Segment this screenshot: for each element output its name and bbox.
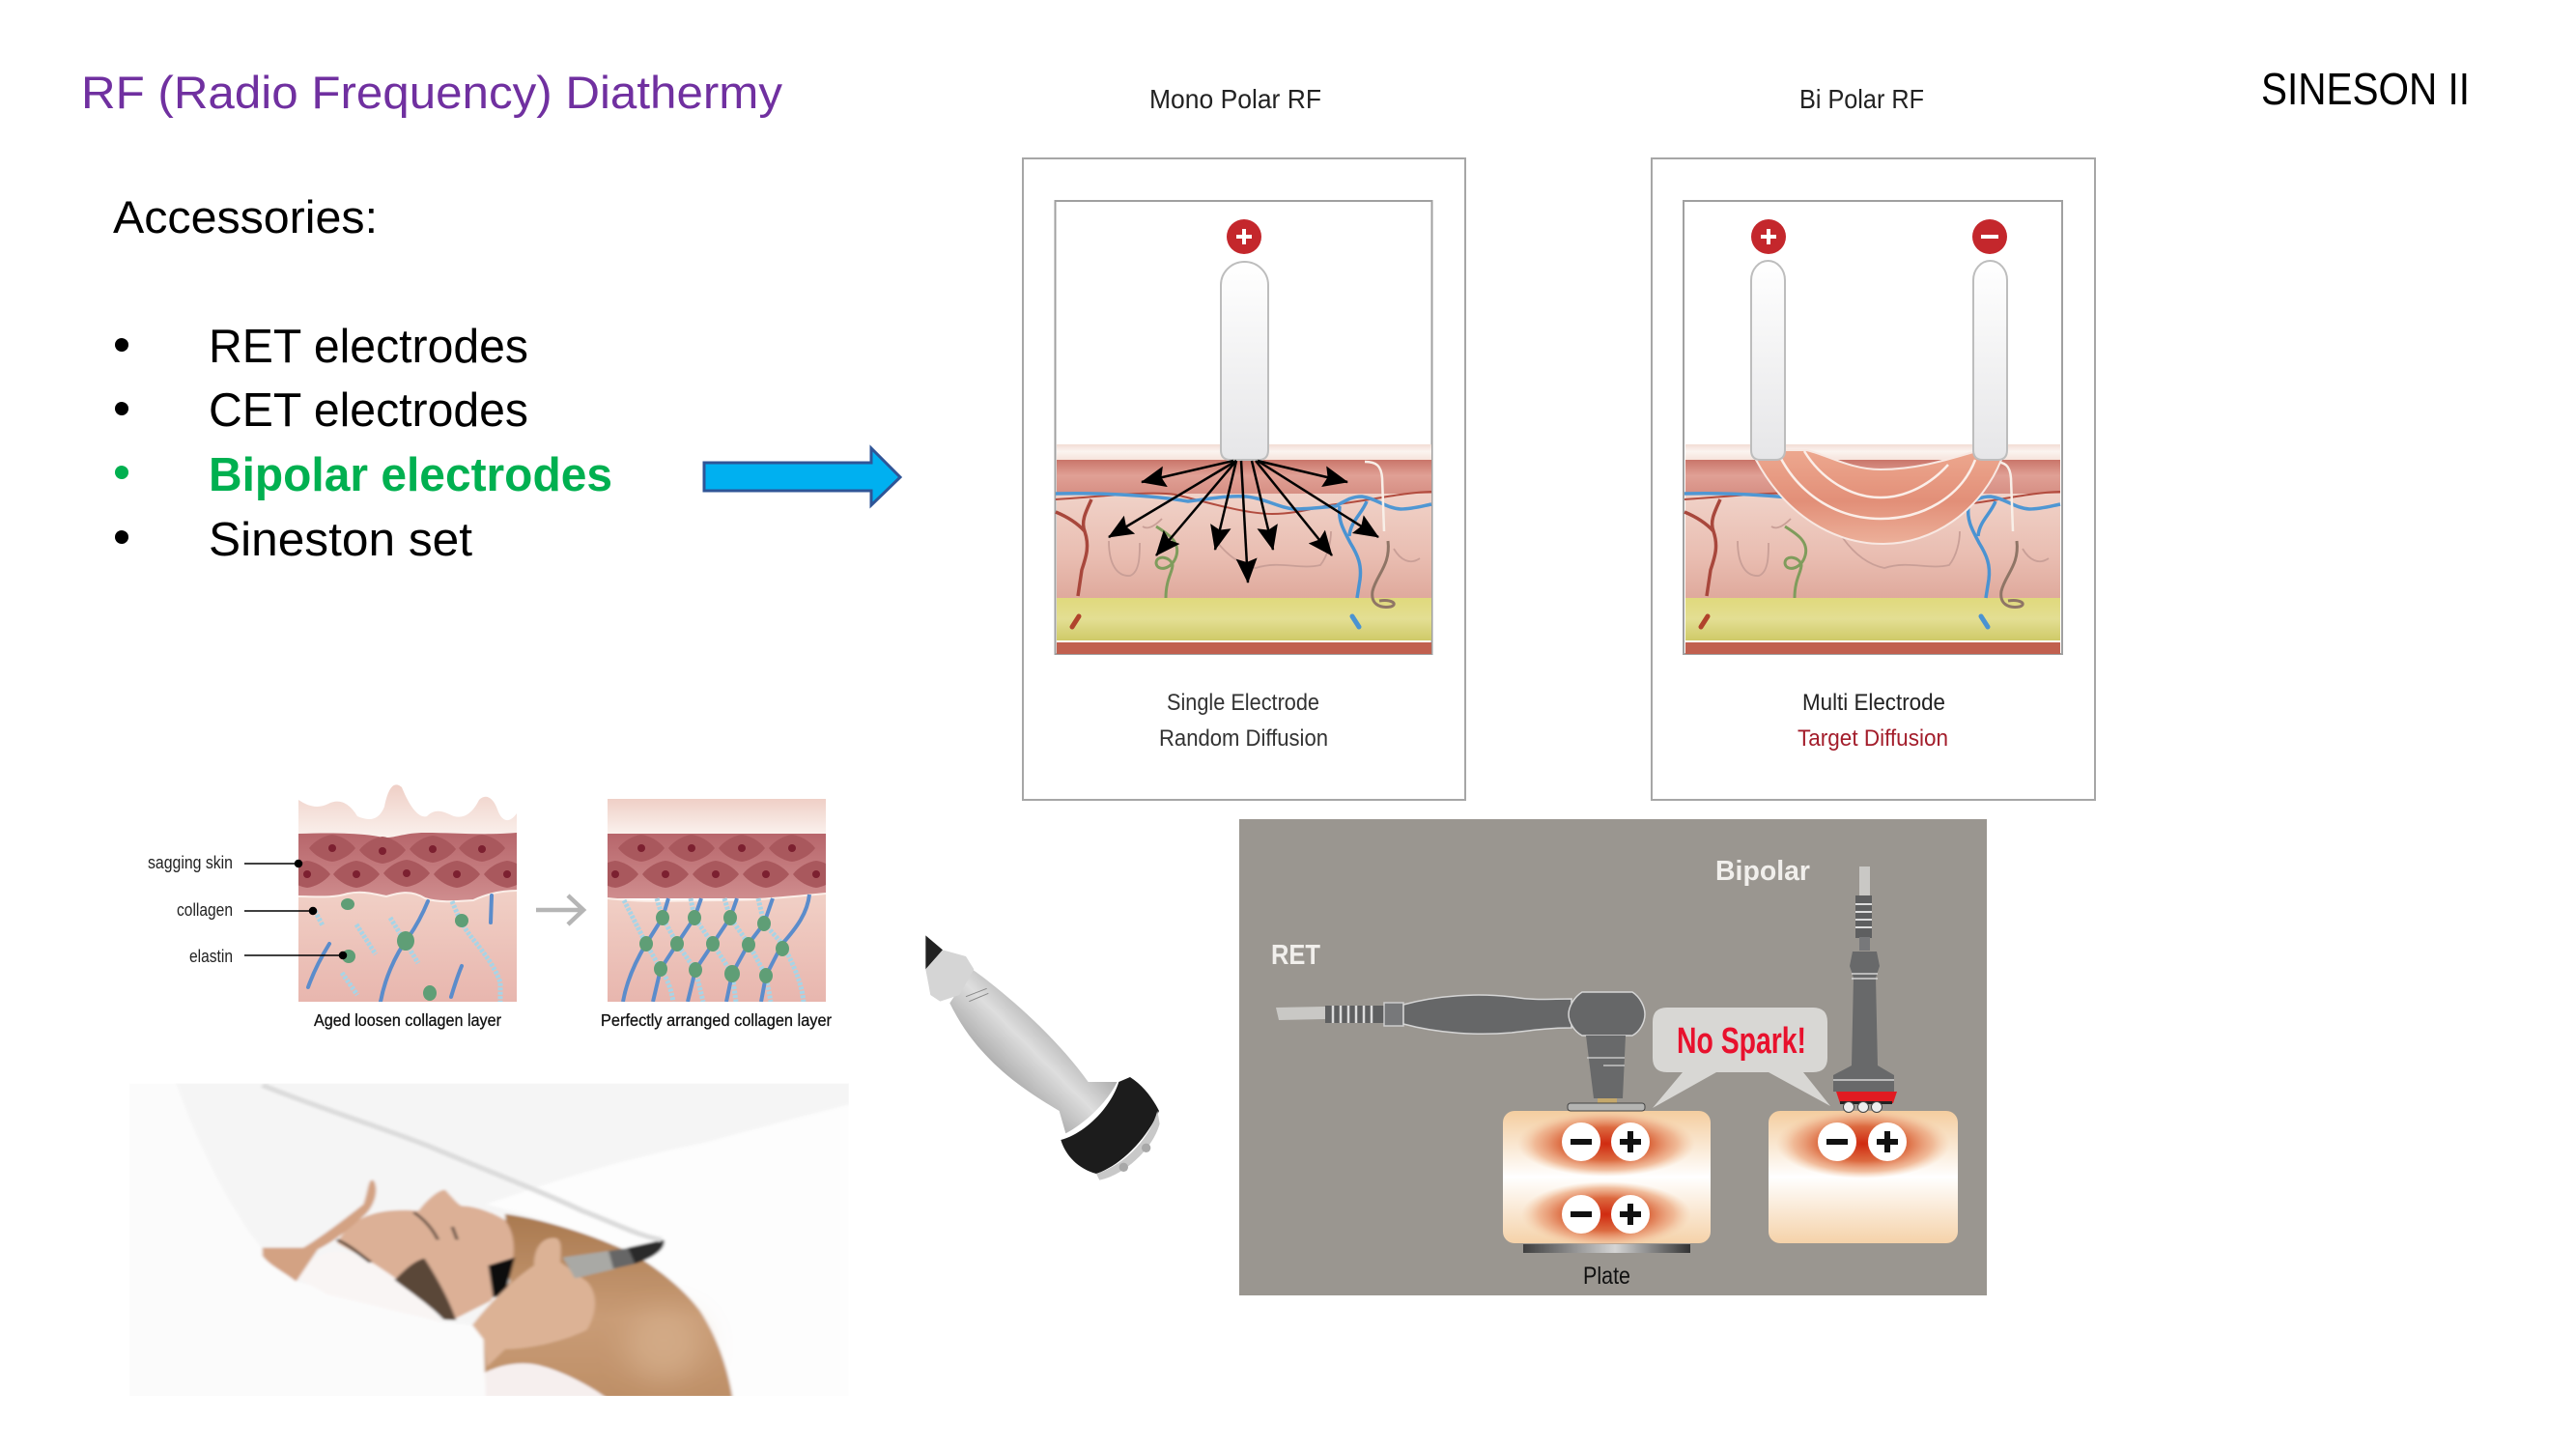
- label: elastin: elastin: [189, 947, 233, 966]
- therapist robe: [479, 1343, 487, 1396]
- electrode tip black: [489, 1258, 515, 1297]
- RET handpiece: [1276, 992, 1645, 1111]
- label: collagen: collagen: [177, 900, 233, 920]
- icon: plus terminal: [1227, 219, 1261, 254]
- hair: [395, 1259, 456, 1321]
- panel: bi polar RF: [1652, 158, 2095, 800]
- list item: CET electrodes: CET electrodes: [209, 384, 528, 437]
- label: sagging skin: sagging skin: [148, 853, 233, 872]
- label: Plate: Plate: [1583, 1263, 1630, 1290]
- list item: Sineston set: Sineston set: [209, 514, 472, 566]
- skin cross-section: [1056, 444, 1431, 654]
- electrode: [1221, 262, 1268, 460]
- panel: mono polar RF: [1023, 158, 1465, 800]
- title: RF (Radio Frequency) Diathermy: [81, 68, 782, 119]
- handpiece: [563, 1251, 615, 1278]
- handpiece photo: [925, 935, 1160, 1180]
- icon: plus terminal: [1751, 219, 1786, 254]
- towel: [694, 1298, 724, 1351]
- plate: [1523, 1244, 1690, 1253]
- icon: minus terminal: [1972, 219, 2007, 254]
- photo: treatment: [178, 1084, 848, 1396]
- arrows: random diffusion: [1109, 461, 1378, 582]
- diagram: aged collagen layer: [244, 784, 530, 1002]
- caption: multi electrode: Multi Electrode: [1802, 690, 1945, 716]
- arrow: aged to arranged collagen: [536, 895, 583, 924]
- cable: [263, 1085, 662, 1239]
- label: Bipolar: Bipolar: [1715, 856, 1810, 887]
- tissue block: bipolar: [1769, 1109, 1958, 1243]
- list item: RET electrodes: RET electrodes: [209, 321, 528, 373]
- caption: perfectly arranged collagen layer: Perfectly arranged collagen layer: [601, 1010, 832, 1030]
- caption: single electrode: Single Electrode: [1167, 690, 1319, 716]
- therapist left hand: [263, 1180, 376, 1282]
- tissue block: RET: [1503, 1111, 1711, 1247]
- label: RET: RET: [1271, 940, 1320, 971]
- labels: skin diagram: [148, 853, 233, 966]
- face: [337, 1190, 514, 1321]
- lower towel: [599, 1391, 603, 1394]
- heading: Bi Polar RF: Bi Polar RF: [1799, 84, 1924, 114]
- product name: SINESON II: [2261, 64, 2470, 114]
- callout: No Spark: No Spark!: [1677, 1021, 1806, 1062]
- leader lines: [244, 860, 346, 958]
- heading: Mono Polar RF: Mono Polar RF: [1149, 84, 1321, 114]
- head wrap: [298, 1251, 440, 1321]
- list item: Bipolar electrodes: Bipolar electrodes: [209, 449, 612, 501]
- caption: random diffusion: Random Diffusion: [1159, 725, 1328, 752]
- electrode: right: [1973, 261, 2007, 460]
- therapist right hand: [472, 1237, 595, 1367]
- bipolar handpiece: [1833, 867, 1897, 1113]
- caption: target diffusion: Target Diffusion: [1798, 725, 1948, 752]
- accessories list: [115, 321, 612, 566]
- skin cross-section: [1684, 444, 2060, 654]
- arrow: blue pointing to diagrams: [704, 448, 900, 505]
- caption: aged loosen collagen layer: Aged loosen collagen layer: [314, 1010, 501, 1030]
- panel: RET vs bipolar diagram: [1239, 819, 1987, 1295]
- target diffusion zone: [1756, 450, 2001, 544]
- electrode: left: [1751, 261, 1785, 460]
- callout: No Spark: [1653, 1008, 1830, 1108]
- accessories heading: Accessories:: [113, 191, 378, 242]
- eyebrow: [413, 1212, 457, 1239]
- diagram: arranged collagen layer: [608, 799, 826, 1002]
- shoulder: [484, 1214, 733, 1404]
